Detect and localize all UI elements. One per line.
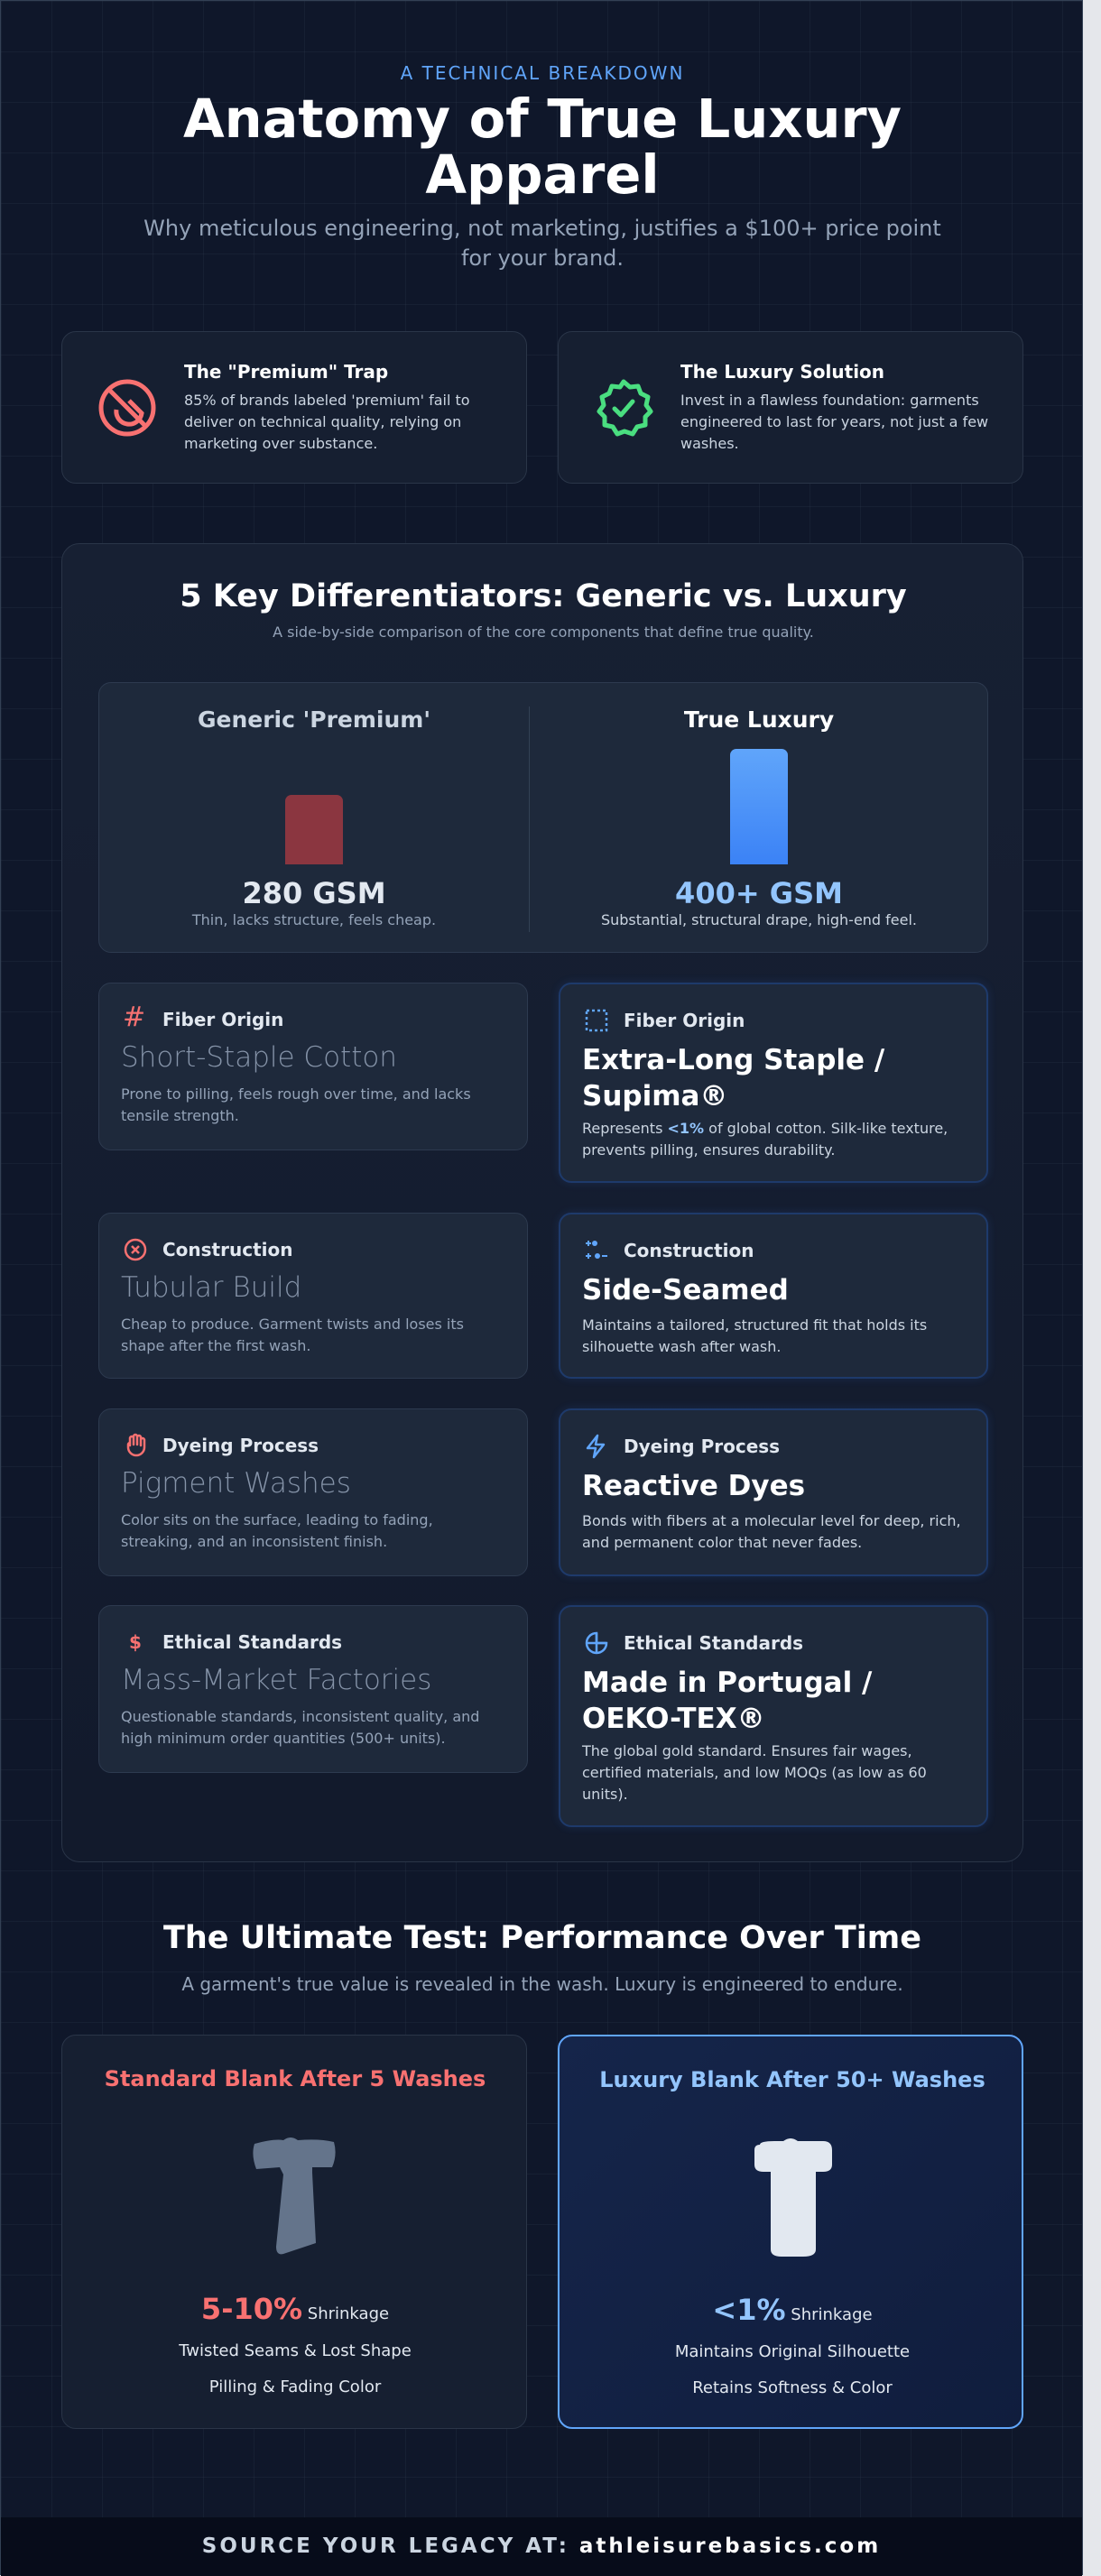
row: construction luxury: Side-Seamed <box>582 1274 789 1306</box>
row: ethics luxury: Made in Portugal / OEKO-TEX® <box>582 1667 872 1735</box>
GSM comparison <box>98 682 988 953</box>
title: Anatomy of True Luxury <box>183 88 902 150</box>
row: fiber luxury: Fiber Origin <box>624 1010 745 1031</box>
stat: <1% Shrinkage <box>712 2293 873 2327</box>
row: fiber luxury: Represents <1% of global cotton. Silk-like texture, prevents pilling, ensures durability. <box>582 1120 948 1159</box>
row: dyeing generic <box>98 1408 528 1576</box>
bar: 280 GSM <box>285 795 343 864</box>
row: fiber generic: Prone to pilling, feels rough over time, and lacks tensile strength. <box>121 1085 471 1124</box>
section subheading: A garment's true value is revealed in the wash. Luxury is engineered to endure. <box>181 1973 903 1995</box>
row: dyeing generic: Color sits on the surface, leading to fading, streaking, and an inconsistent finish. <box>121 1511 433 1550</box>
generic column: 280 GSM <box>242 876 386 910</box>
text: The "Premium" Trap <box>184 361 388 383</box>
row: construction luxury: Maintains a tailored, structured fit that holds its silhouette wash after wash. <box>582 1316 927 1355</box>
card: luxury blank: Retains Softness & Color <box>692 2378 893 2397</box>
row: ethics generic <box>98 1605 528 1773</box>
row: construction generic: Tubular Build <box>121 1271 301 1304</box>
row: dyeing luxury: Dyeing Process <box>624 1436 780 1457</box>
card: standard blank: Pilling & Fading Color <box>209 2377 381 2396</box>
section heading: ultimate test: The Ultimate Test: Performance Over Time <box>163 1920 921 1956</box>
row: dyeing generic: Dyeing Process <box>162 1435 319 1456</box>
row: construction generic <box>98 1213 528 1379</box>
row: fiber generic: Fiber Origin <box>162 1009 283 1030</box>
icon: twisted tshirt <box>253 2137 336 2254</box>
generic column <box>191 706 436 928</box>
row: fiber generic: Short-Staple Cotton <box>121 1041 397 1074</box>
text: Invest in a flawless foundation: garments engineered to last for years, not just a few washes. <box>680 392 988 452</box>
card: standard blank <box>61 2035 527 2429</box>
icon: prohibited <box>99 379 155 437</box>
card: standard blank: Twisted Seams & Lost Shape <box>179 2341 412 2360</box>
eyebrow: A TECHNICAL BREAKDOWN <box>401 62 684 84</box>
row: ethics luxury <box>559 1605 988 1827</box>
luxury column: 400+ GSM <box>675 876 843 910</box>
text: The Luxury Solution <box>680 361 884 383</box>
footer <box>1 2517 1082 2576</box>
card: luxury blank <box>558 2035 1023 2429</box>
card: premium trap <box>61 331 527 484</box>
title: Apparel <box>425 143 660 206</box>
icon: seams <box>586 1241 607 1259</box>
row: dyeing generic: Pigment Washes <box>121 1467 351 1500</box>
subtitle: Why meticulous engineering, not marketing, justifies a $100+ price point for your brand. <box>143 216 941 271</box>
row: fiber generic <box>98 983 528 1150</box>
icon: hash: # <box>123 1002 145 1033</box>
footer: SOURCE YOUR LEGACY AT: athleisurebasics.com <box>202 2534 881 2558</box>
icon: sparkle <box>585 1009 608 1032</box>
icon: badge check <box>597 379 653 437</box>
row: ethics luxury: Ethical Standards <box>624 1632 803 1654</box>
luxury column <box>601 706 917 928</box>
row: ethics luxury: The global gold standard. Ensures fair wages, certified materials, and low MOQs (as low as 60 units). <box>582 1742 927 1803</box>
row: construction luxury: Construction <box>624 1240 754 1261</box>
row: ethics generic: Ethical Standards <box>162 1631 342 1653</box>
heading: 5 Key Differentiators: Generic vs. Luxury <box>180 578 907 614</box>
row: construction luxury <box>559 1213 988 1379</box>
row: fiber luxury <box>559 983 988 1183</box>
text: 85% of brands labeled 'premium' fail to deliver on technical quality, relying on marketing over substance. <box>184 392 470 452</box>
bar: 400 GSM <box>730 749 788 864</box>
luxury column: True Luxury <box>684 706 834 733</box>
icon: hand <box>126 1433 146 1456</box>
text <box>184 361 470 452</box>
card: standard blank: Standard Blank After 5 Washes <box>105 2066 486 2091</box>
stat: 5-10% Shrinkage <box>201 2292 389 2326</box>
row: ethics generic: Questionable standards, inconsistent quality, and high minimum order quantities (500+ units). <box>121 1708 479 1747</box>
icon: dollar: $ <box>129 1631 142 1653</box>
text <box>680 361 988 452</box>
card: luxury solution <box>558 331 1023 484</box>
card: luxury blank: Luxury Blank After 50+ Washes <box>599 2067 985 2092</box>
generic column: Generic 'Premium' <box>198 706 430 733</box>
luxury column: Substantial, structural drape, high-end feel. <box>601 911 917 928</box>
icon: globe <box>585 1631 608 1655</box>
row: dyeing luxury: Bonds with fibers at a molecular level for deep, rich, and permanent color that never fades. <box>582 1512 961 1551</box>
title <box>183 88 902 206</box>
card: luxury blank: Maintains Original Silhouette <box>675 2342 910 2361</box>
row: construction generic: Cheap to produce. Garment twists and loses its shape after the first wash. <box>121 1316 464 1354</box>
row: dyeing luxury <box>559 1408 988 1576</box>
row: ethics generic: Mass-Market Factories <box>121 1664 431 1696</box>
panel: differentiators <box>61 543 1023 1862</box>
icon: bolt <box>587 1435 605 1458</box>
icon: x circle <box>125 1238 146 1261</box>
row: fiber luxury: Extra-Long Staple / Supima® <box>582 1044 884 1113</box>
subheading: A side-by-side comparison of the core components that define true quality. <box>273 623 814 641</box>
row: construction generic: Construction <box>162 1239 292 1260</box>
row: dyeing luxury: Reactive Dyes <box>582 1470 805 1502</box>
generic column: Thin, lacks structure, feels cheap. <box>192 911 436 928</box>
icon: intact tshirt <box>754 2138 832 2257</box>
